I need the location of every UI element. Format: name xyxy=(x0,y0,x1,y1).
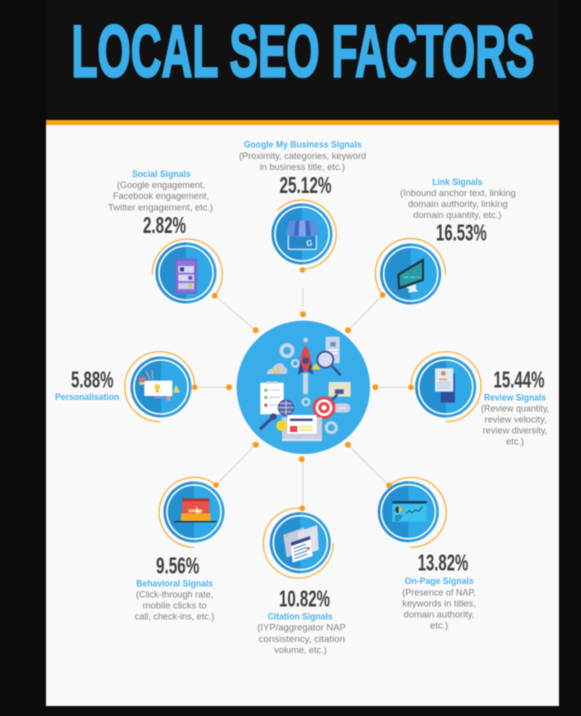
icon: storefront: G xyxy=(306,239,312,248)
badge: Link xyxy=(375,239,445,304)
description: consistency, citation xyxy=(259,634,345,644)
description xyxy=(108,180,213,212)
description: Facebook engagement, xyxy=(113,191,209,201)
value: 10.82% xyxy=(279,586,330,612)
icon: review on phone xyxy=(435,368,455,403)
factor: Review Signals xyxy=(408,352,549,447)
central illustration xyxy=(237,321,370,454)
description: volume, etc.) xyxy=(274,645,327,655)
description: etc.) xyxy=(430,620,448,630)
badge: Personalisation xyxy=(125,352,198,422)
heading: Citation Signals xyxy=(268,612,333,622)
heading: On-Page Signals xyxy=(405,576,474,586)
description: etc.) xyxy=(506,437,524,447)
description: (IYP/aggregator NAP xyxy=(257,623,346,633)
factor: Personalisation xyxy=(55,352,198,422)
description xyxy=(135,590,214,622)
icon: phone xyxy=(175,258,197,294)
description: keywords in titles, xyxy=(402,598,476,608)
description: domain authority, xyxy=(404,609,474,619)
connector lines and dots xyxy=(195,288,411,508)
description xyxy=(239,151,366,172)
value: 5.88% xyxy=(71,367,114,393)
badge: Behavioral xyxy=(159,477,224,547)
badge: Citation xyxy=(263,506,333,578)
description: (Google engagement, xyxy=(117,180,205,190)
description: call, check-ins, etc.) xyxy=(135,612,214,622)
factor: On-Page Signals xyxy=(378,477,476,630)
icon: monitor xyxy=(397,258,424,293)
value: 16.53% xyxy=(436,220,487,246)
heading: Review Signals xyxy=(484,392,546,402)
heading: Behavioral Signals xyxy=(136,578,213,588)
factor: Behavioral Signals xyxy=(135,477,224,622)
heading: Social Signals xyxy=(132,169,191,179)
description xyxy=(402,587,476,630)
icon: laptop with cursor xyxy=(174,498,217,522)
description: domain authority, linking xyxy=(408,199,508,209)
description: domain quantity, etc.) xyxy=(413,210,501,220)
badge: Google My Business xyxy=(272,200,336,273)
value: 15.44% xyxy=(494,366,544,392)
heading: Personalisation xyxy=(55,392,120,402)
description: (Presence of NAP, xyxy=(402,587,476,597)
description: review diversity, xyxy=(483,426,547,436)
factor: Link Signals xyxy=(375,177,516,304)
header band xyxy=(46,0,559,121)
description: review velocity, xyxy=(485,415,547,425)
orange divider bar xyxy=(46,120,559,125)
description: Twitter engagement, etc.) xyxy=(108,202,213,212)
badge: On-Page xyxy=(378,477,446,547)
description: (Inbound anchor text, linking xyxy=(400,188,516,198)
heading: Google My Business Signals xyxy=(244,140,362,150)
icon: idea board xyxy=(139,370,180,401)
value: 25.12% xyxy=(280,172,332,198)
badge: Review xyxy=(408,352,481,422)
icon: citation pages xyxy=(283,525,319,563)
badge: Social xyxy=(152,239,222,304)
factor: Google My Business Signals xyxy=(239,140,366,273)
factor: Social Signals xyxy=(108,169,222,304)
icon: analytics page xyxy=(392,501,427,522)
content panel xyxy=(46,125,559,706)
description: mobile clicks to xyxy=(143,601,207,611)
description: (Click-through rate, xyxy=(136,590,213,600)
description xyxy=(257,623,346,655)
value: 13.82% xyxy=(418,550,468,576)
description xyxy=(481,404,549,447)
description: in business title, etc.) xyxy=(260,162,345,172)
description xyxy=(400,188,516,220)
factor: Citation Signals xyxy=(257,506,346,655)
value: 9.56% xyxy=(156,552,199,578)
description: (Review quantity, xyxy=(481,404,549,414)
description: (Proximity, categories, keyword xyxy=(239,151,366,161)
value: 2.82% xyxy=(143,212,186,238)
heading: Link Signals xyxy=(432,177,483,187)
